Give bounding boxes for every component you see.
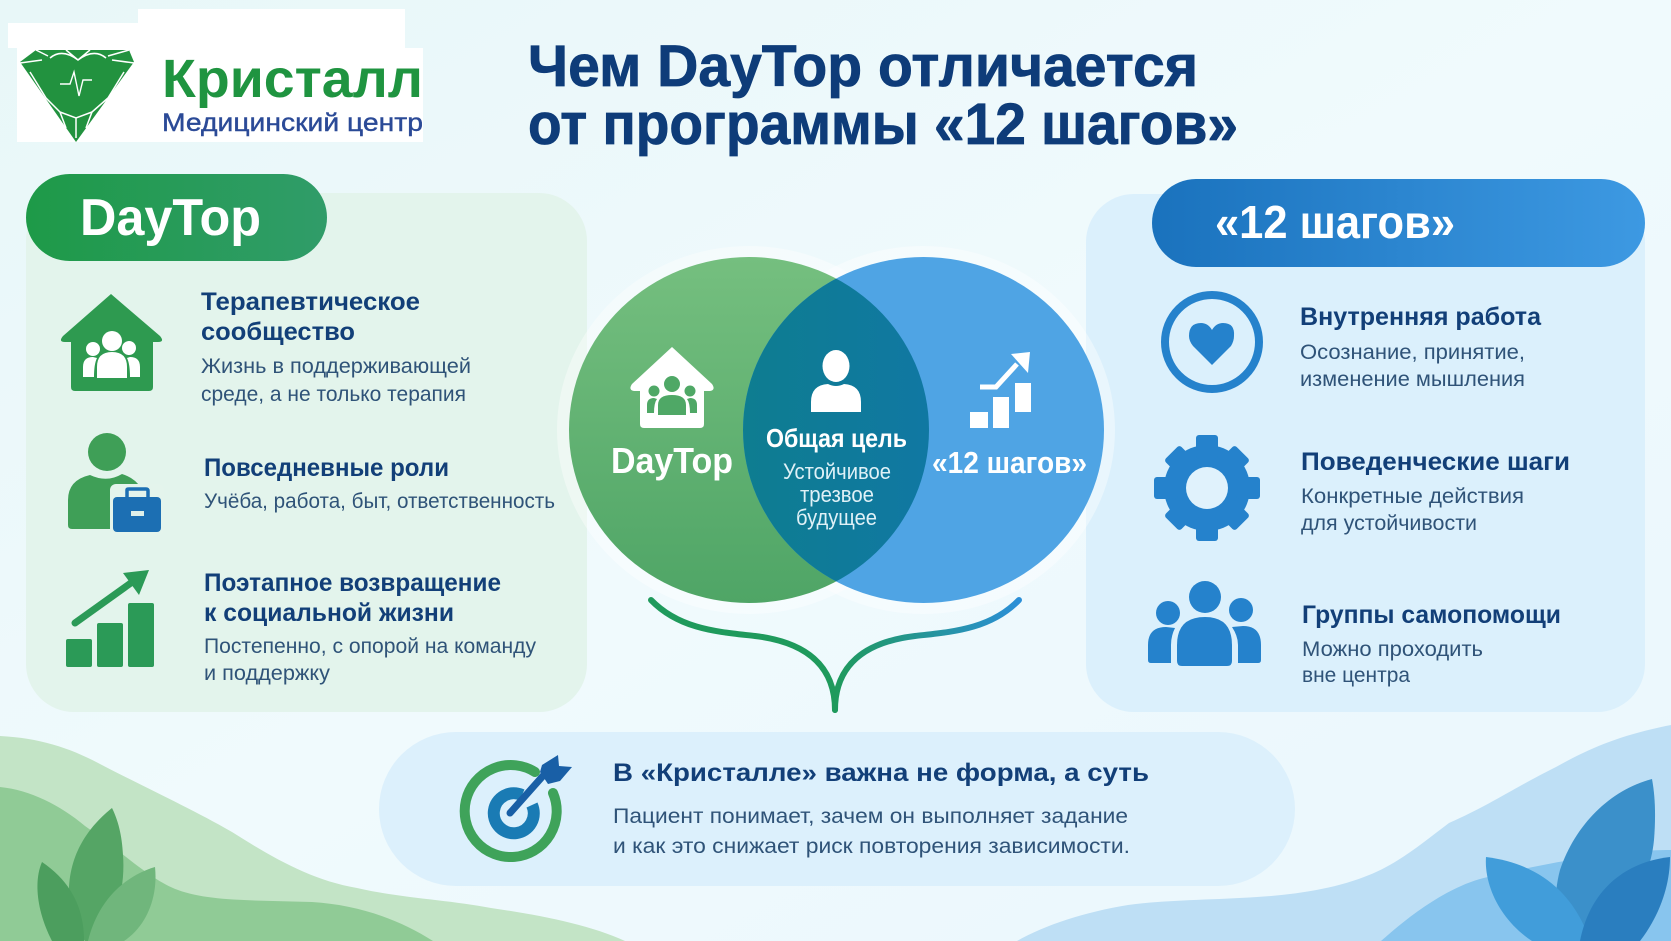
item: therapeutic community: Терапевтическое bbox=[201, 288, 420, 316]
item: inner work: Внутренняя работа bbox=[1300, 303, 1542, 331]
item: inner work bbox=[1300, 303, 1542, 391]
item: behavioural steps: Поведенческие шаги bbox=[1301, 448, 1570, 476]
item: social return: к социальной жизни bbox=[204, 599, 454, 627]
brand name: Кристалл bbox=[162, 49, 423, 109]
item: social return: и поддержку bbox=[204, 661, 330, 685]
label: DayTop: DayTop bbox=[611, 440, 733, 481]
item: daily roles: Учёба, работа, быт, ответственность bbox=[204, 489, 555, 513]
item: self-help groups bbox=[1302, 601, 1561, 687]
item: social return bbox=[204, 569, 536, 685]
item: social return: Поэтапное возвращение bbox=[204, 569, 501, 597]
background waves and leaves: left bbox=[0, 736, 625, 941]
venn diagram bbox=[557, 246, 1115, 614]
title: от программы «12 шагов» bbox=[528, 92, 1238, 157]
panel: 12 steps bbox=[1086, 179, 1645, 712]
item: therapeutic community: среде, а не только терапия bbox=[201, 382, 466, 406]
item: therapeutic community bbox=[201, 288, 471, 406]
item: social return: Постепенно, с опорой на команду bbox=[204, 634, 536, 658]
item: behavioural steps: для устойчивости bbox=[1301, 511, 1477, 535]
item: behavioural steps: Конкретные действия bbox=[1301, 484, 1524, 508]
callout heading: В «Кристалле» важна не форма, а суть bbox=[613, 759, 1149, 787]
12 steps pill: «12 шагов» bbox=[1215, 196, 1455, 248]
label: common goal: трезвое bbox=[800, 482, 874, 507]
label: common goal: будущее bbox=[796, 505, 877, 530]
label: common goal: Общая цель bbox=[766, 423, 907, 453]
item: self-help groups: Группы самопомощи bbox=[1302, 601, 1561, 629]
icon: house bbox=[630, 347, 714, 428]
icon: gear bbox=[1154, 435, 1260, 541]
background waves and leaves: right bbox=[1017, 725, 1671, 941]
callout: bottom bbox=[379, 732, 1295, 886]
item: inner work: изменение мышления bbox=[1300, 367, 1525, 391]
icon: target with arrow bbox=[465, 755, 572, 857]
item: self-help groups: Можно проходить bbox=[1302, 637, 1483, 661]
icon: heart in circle bbox=[1165, 295, 1259, 389]
callout text: Пациент понимает, зачем он выполняет задание bbox=[613, 804, 1128, 828]
label: common goal bbox=[766, 423, 907, 530]
icon: group of people bbox=[1148, 581, 1261, 666]
item: therapeutic community: Жизнь в поддерживающей bbox=[201, 354, 471, 378]
item: therapeutic community: сообщество bbox=[201, 318, 355, 346]
item: inner work: Осознание, принятие, bbox=[1300, 340, 1525, 364]
title bbox=[528, 34, 1238, 157]
callout text: и как это снижает риск повторения зависимости. bbox=[613, 834, 1130, 858]
panel: DayTop bbox=[26, 174, 587, 712]
icon: person bbox=[811, 350, 861, 412]
label: common goal: Устойчивое bbox=[783, 459, 891, 484]
item: behavioural steps bbox=[1301, 448, 1570, 535]
DayTop pill bbox=[26, 174, 327, 261]
icon: growth chart bbox=[66, 570, 154, 667]
connector bracket bbox=[651, 600, 1019, 710]
icon: crystal heart bbox=[20, 50, 134, 142]
item: daily roles bbox=[204, 454, 555, 513]
item: daily roles: Повседневные роли bbox=[204, 454, 449, 482]
icon: person with briefcase bbox=[68, 433, 164, 535]
DayTop pill: DayTop bbox=[80, 189, 261, 247]
title: Чем DayTop отличается bbox=[528, 34, 1198, 99]
icon: house with people bbox=[61, 294, 162, 391]
brand subtitle: Медицинский центр bbox=[162, 109, 423, 137]
12 steps pill bbox=[1152, 179, 1645, 267]
label: 12 steps: «12 шагов» bbox=[932, 445, 1087, 480]
item: self-help groups: вне центра bbox=[1302, 663, 1410, 687]
callout text bbox=[613, 804, 1130, 858]
icon: steps with arrow bbox=[970, 352, 1031, 428]
logo bbox=[8, 9, 423, 142]
